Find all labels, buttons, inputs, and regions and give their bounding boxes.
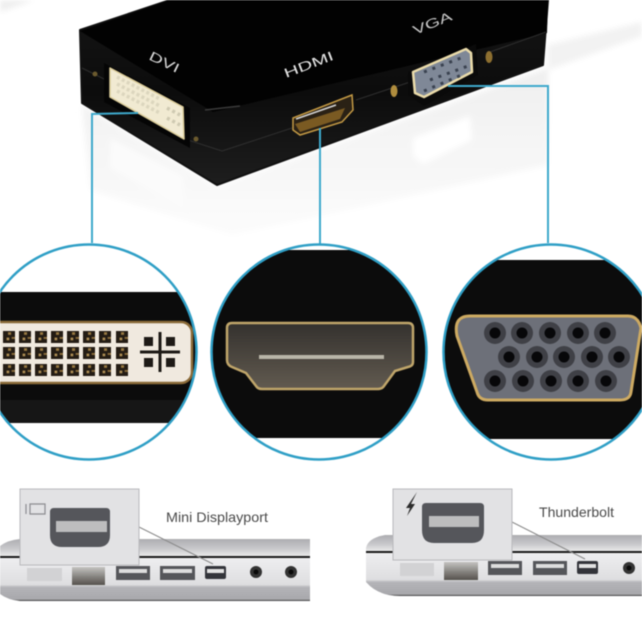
callout zoom panel [393, 489, 512, 560]
connector line: DVI [92, 113, 138, 243]
VGA holes [484, 322, 630, 392]
circle: HDMI close-up [205, 244, 435, 460]
laptop: Mini Displayport [0, 489, 310, 601]
VGA port [408, 44, 478, 106]
HDMI port [293, 95, 353, 135]
ports [400, 561, 635, 580]
HDMI contact bar [259, 355, 384, 359]
connector line: HDMI [319, 128, 321, 245]
adapter reflection [0, 0, 642, 235]
laptop: Thunderbolt [366, 489, 642, 596]
DVI pins [3, 331, 128, 376]
screw VGA right [486, 51, 492, 63]
screw left [92, 72, 98, 76]
ports [27, 566, 297, 585]
callout zoom panel [20, 489, 139, 565]
connector line: VGA [448, 86, 548, 243]
circle: DVI close-up [0, 244, 210, 460]
DVI cross pin [140, 332, 180, 372]
callout pointer line [512, 522, 585, 559]
icon: display port [26, 504, 45, 514]
laptop lid [366, 535, 642, 552]
DVI port [104, 63, 190, 148]
screw VGA left [390, 85, 398, 97]
label: VGA: VGA [411, 8, 455, 38]
label: DVI: DVI [147, 48, 182, 76]
label: Thunderbolt: Thunderbolt [539, 504, 614, 520]
icon: thunderbolt [406, 492, 417, 516]
label: HDMI: HDMI [282, 48, 336, 81]
circle: VGA close-up [440, 244, 642, 460]
screw right [194, 136, 198, 142]
adapter body [80, 0, 548, 185]
callout pointer line [139, 527, 213, 564]
laptop lid [0, 539, 310, 557]
label: Mini Displayport: Mini Displayport [166, 509, 268, 525]
adapter top surface [80, 0, 548, 112]
